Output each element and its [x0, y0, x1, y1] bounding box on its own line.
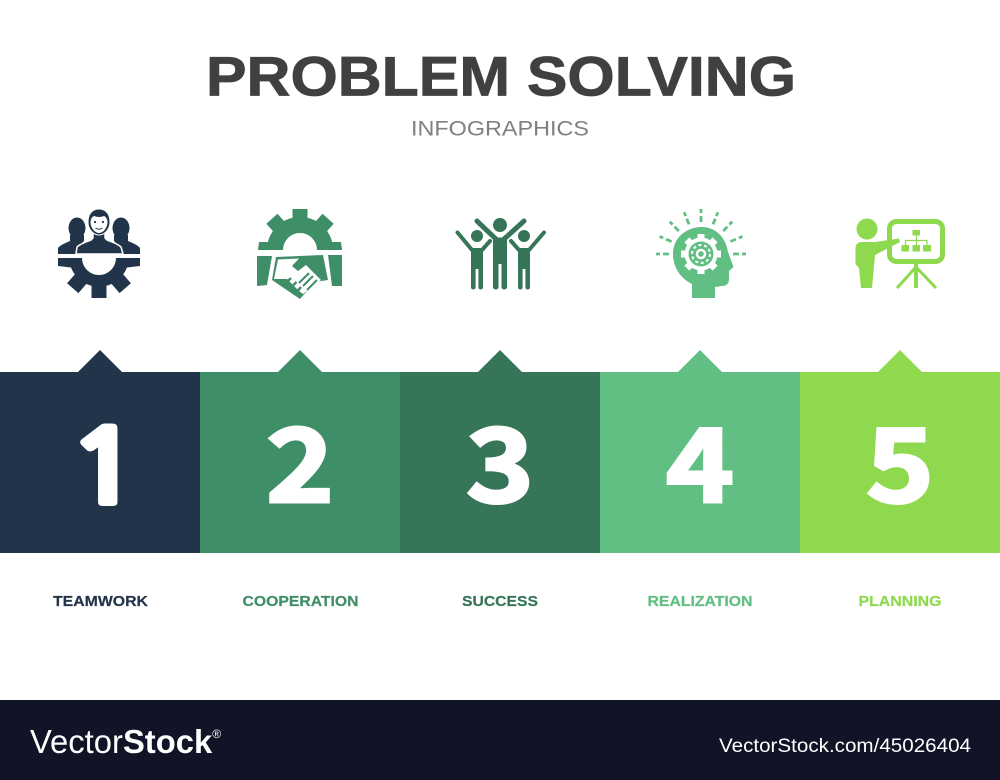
- panel: step 2: [200, 350, 400, 553]
- label: teamwork: TEAMWORK: [53, 594, 149, 610]
- footer image id: VectorStock.com/45026404: [719, 736, 971, 757]
- icon: cooperation handshake under gear: [257, 209, 342, 299]
- footer logo: ®: [212, 727, 221, 741]
- icon: realization head with gear and rays: [656, 209, 746, 298]
- number 2: 2: [266, 385, 334, 532]
- number 1: 1: [67, 417, 143, 518]
- number 3: 3: [466, 385, 534, 532]
- icon: planning presenter with chart board: [856, 218, 942, 288]
- number 4: 4: [666, 385, 734, 532]
- panel: step 4: [600, 350, 800, 553]
- footer bar: [0, 700, 1000, 780]
- panel: step 3: [400, 350, 600, 553]
- label: cooperation: COOPERATION: [242, 594, 358, 610]
- label: realization: REALIZATION: [648, 594, 752, 610]
- number 5: 5: [866, 385, 934, 532]
- panel: step 1: [0, 350, 200, 553]
- icon: success three people cheering: [458, 218, 544, 290]
- icon: teamwork people on gear: [58, 209, 140, 298]
- subtitle: INFOGRAPHICS: [411, 118, 589, 140]
- footer logo: VectorStock: [30, 723, 213, 760]
- label: planning: PLANNING: [858, 594, 942, 610]
- title: PROBLEM SOLVING: [206, 44, 796, 108]
- label: success: SUCCESS: [462, 594, 538, 610]
- panel: step 5: [800, 350, 1000, 553]
